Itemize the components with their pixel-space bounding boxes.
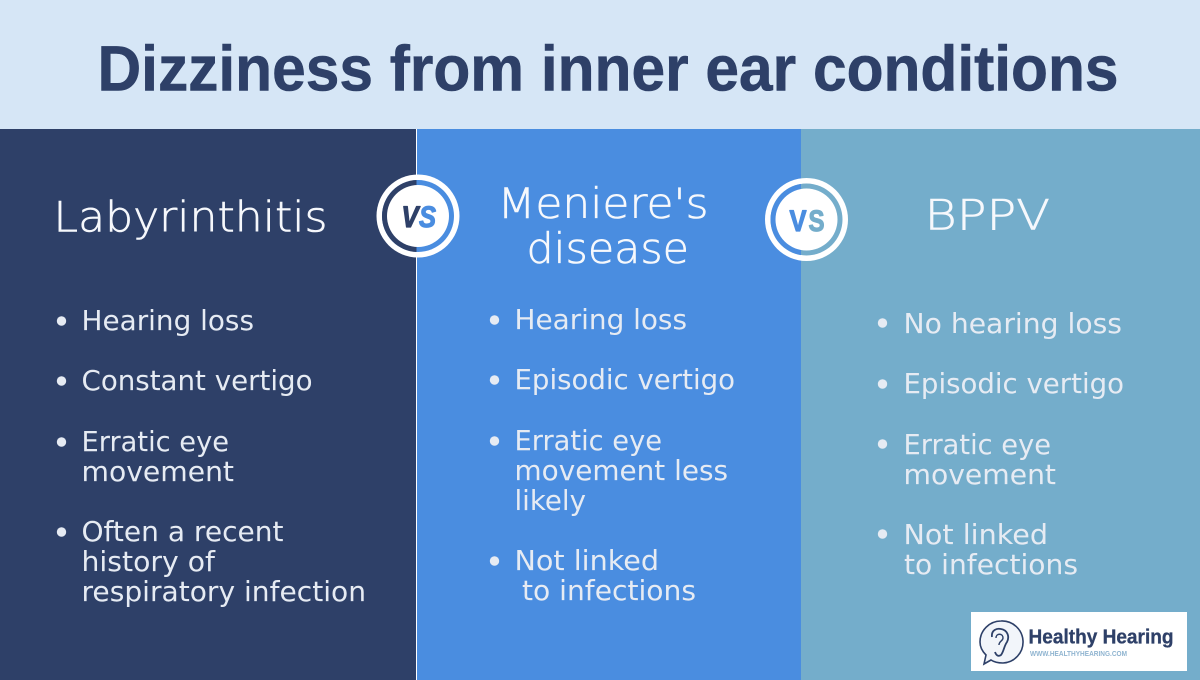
- symptom list: Meniere's disease: Erratic eye: [514, 424, 662, 457]
- symptom list: BPPV: No hearing loss: [904, 307, 1122, 340]
- symptom list: BPPV: Episodic vertigo: [904, 367, 1124, 400]
- symptom list: Labyrinthitis: Erratic eye: [82, 425, 229, 458]
- logo wordmark: Healthy Hearing: [1028, 626, 1174, 648]
- panel: Labyrinthitis: [0, 129, 416, 680]
- vs badge: Meniere's vs BPPV: S: [808, 205, 824, 238]
- symptom list: BPPV: movement: [904, 458, 1056, 491]
- symptom list: Labyrinthitis: movement: [82, 455, 234, 488]
- symptom list: Meniere's disease: Episodic vertigo: [514, 363, 735, 396]
- logo url: WWW.HEALTHYHEARING.COM: [1030, 651, 1127, 658]
- symptom list: Meniere's disease: movement less: [514, 454, 728, 487]
- symptom list: BPPV: Erratic eye: [904, 428, 1051, 461]
- vs badge: Meniere's vs BPPV: V: [790, 205, 806, 238]
- symptom list: Labyrinthitis: Often a recent: [82, 515, 284, 548]
- symptom list: BPPV: Not linked: [904, 518, 1048, 551]
- vs badge: Labyrinthitis vs Meniere's: V: [402, 201, 421, 234]
- symptom list: Meniere's disease: likely: [514, 484, 586, 517]
- symptom list: Meniere's disease: [490, 303, 735, 607]
- title: Dizziness from inner ear conditions: [98, 32, 1118, 104]
- symptom list: BPPV: [878, 307, 1124, 581]
- panel: BPPV: [801, 129, 1200, 680]
- vs badge: Meniere's vs BPPV: [765, 178, 848, 261]
- symptom list: BPPV: to infections: [904, 548, 1078, 581]
- logo: Healthy Hearing: [971, 612, 1187, 671]
- icon: ear in speech bubble: [980, 621, 1023, 664]
- heading: Meniere's disease: [498, 179, 708, 273]
- heading: Meniere's disease: Meniere's: [498, 179, 708, 228]
- vs badge: Labyrinthitis vs Meniere's: [376, 174, 460, 258]
- heading: BPPV: BPPV: [924, 190, 1050, 240]
- heading: Meniere's disease: disease: [526, 224, 689, 273]
- symptom list: Meniere's disease: Hearing loss: [514, 303, 687, 336]
- symptom list: Labyrinthitis: Hearing loss: [82, 304, 254, 337]
- symptom list: Meniere's disease: to infections: [522, 574, 696, 607]
- symptom list: Labyrinthitis: history of: [82, 545, 216, 578]
- vs badge: Labyrinthitis vs Meniere's: S: [419, 201, 436, 234]
- symptom list: Meniere's disease: Not linked: [514, 544, 659, 577]
- panel: Meniere's disease: [417, 129, 801, 680]
- title banner: [0, 0, 1200, 129]
- heading: Labyrinthitis: Labyrinthitis: [54, 192, 328, 242]
- symptom list: Labyrinthitis: Constant vertigo: [82, 364, 312, 397]
- symptom list: Labyrinthitis: respiratory infection: [82, 575, 366, 608]
- symptom list: Labyrinthitis: [57, 304, 366, 608]
